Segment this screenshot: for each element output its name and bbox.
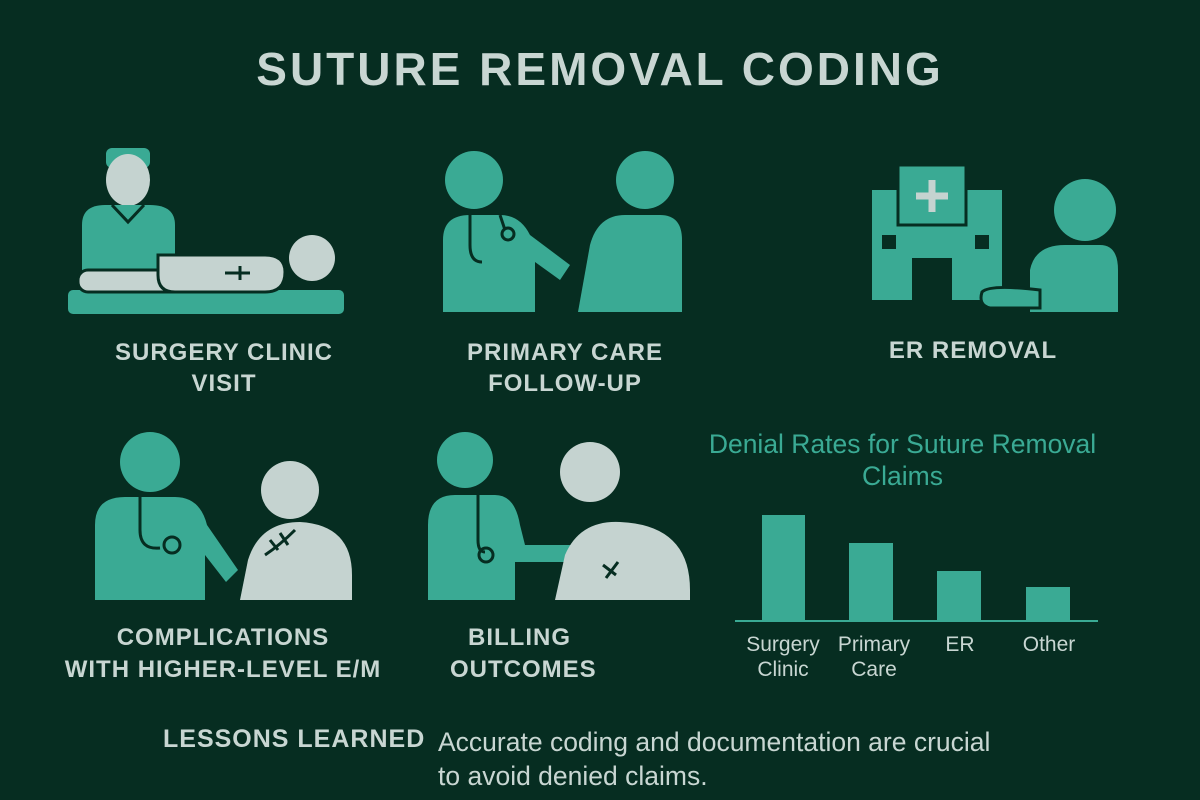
- bar chart: [735, 515, 1098, 681]
- lessons heading: LESSONS LEARNED: [163, 725, 425, 753]
- lessons text: [438, 727, 990, 791]
- bar chart: ER: [945, 633, 975, 656]
- chart title: [709, 429, 1096, 491]
- bar chart: Clinic: [757, 658, 809, 681]
- lessons learned: [163, 725, 990, 791]
- bar chart: Primary: [838, 633, 911, 656]
- label: surgery clinic: SURGERY CLINIC: [115, 339, 333, 366]
- label: primary care: PRIMARY CARE: [467, 339, 663, 366]
- bar chart: Care: [851, 658, 897, 681]
- label: billing: BILLING: [468, 624, 571, 651]
- icon: complications: [95, 432, 352, 600]
- icon: primary care: [443, 151, 682, 312]
- label: surgery clinic: VISIT: [191, 370, 256, 397]
- label: primary care: FOLLOW-UP: [488, 370, 642, 397]
- bar chart: Surgery: [746, 633, 820, 656]
- title: SUTURE REMOVAL CODING: [256, 43, 944, 95]
- lessons text: Accurate coding and documentation are crucial: [438, 727, 990, 757]
- label: complications: COMPLICATIONS: [117, 624, 329, 651]
- label: ER removal: ER REMOVAL: [889, 337, 1057, 364]
- label: billing: OUTCOMES: [450, 656, 597, 683]
- label: complications: WITH HIGHER-LEVEL E/M: [65, 656, 381, 683]
- icon: surgery clinic: [68, 148, 344, 314]
- icon: ER hospital: [872, 165, 1118, 312]
- lessons text: to avoid denied claims.: [438, 761, 708, 791]
- icon: billing: [428, 432, 690, 600]
- label: surgery clinic: [115, 339, 333, 397]
- bar chart: Other: [1023, 633, 1075, 656]
- label: primary care: [467, 339, 663, 397]
- chart title: Claims: [862, 461, 943, 491]
- label: billing: [450, 624, 597, 683]
- chart title: Denial Rates for Suture Removal: [709, 429, 1096, 459]
- label: complications: [64, 624, 381, 683]
